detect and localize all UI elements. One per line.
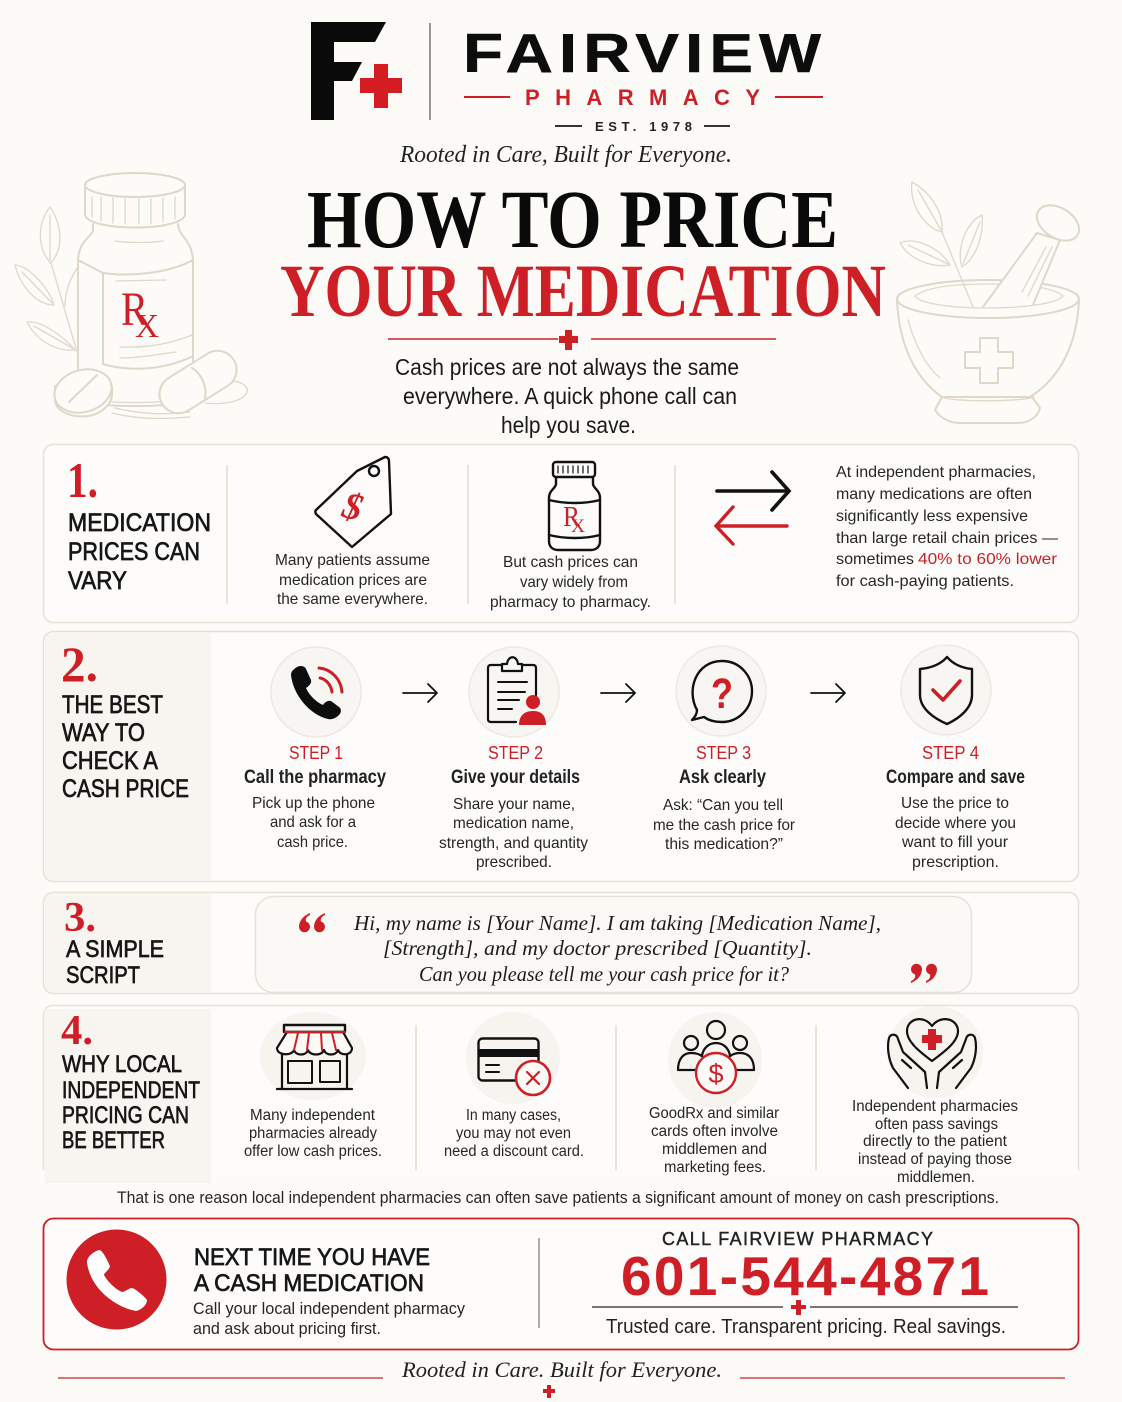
panel: section 1 medication prices can vary [44,444,1078,622]
text: pass savings: instead of paying those [858,1151,1012,1168]
text: middlemen fees: middlemen and [662,1141,767,1158]
text: many patients assume: Many patients assume [275,552,430,569]
wordmark: Pharmacy: PHARMACY [525,85,760,110]
Rx mark: R [121,283,148,336]
text: pass savings: often pass savings [875,1116,998,1133]
text: middlemen fees [649,1105,779,1176]
icon: card with x [466,1012,560,1104]
icon: Rx bottle [549,462,600,550]
heading: 1. [67,452,98,508]
text: middlemen fees: cards often involve [651,1123,778,1140]
step heading: Give your details [451,767,580,788]
step 2 [439,647,588,871]
heading: 3. [64,895,96,941]
arrow [403,684,437,702]
text: pass savings [852,1098,1018,1186]
intro text: help you save. [501,412,636,438]
text: cash prices vary: pharmacy to pharmacy. [490,594,651,611]
heading: THE BEST [62,691,163,719]
icon: shield check [901,645,991,735]
text: many patients assume: medication prices are [279,572,427,589]
phone number block [592,1229,1018,1338]
text: pass savings: middlemen. [897,1169,975,1186]
leaves [15,207,78,352]
text: discount card: you may not even [456,1125,571,1142]
heading: CASH PRICE [62,775,189,803]
text: independent pharmacies savings: sometimes [836,551,914,568]
text: cash prices vary: But cash prices can [503,554,638,571]
wordmark: Fairview: FAIRVIEW [463,22,827,84]
text: low cash prices: Many independent [250,1107,376,1124]
phone number block: Trusted care. Transparent pricing. Real savings. [606,1315,1006,1338]
bottle body [78,224,193,406]
step text [439,796,588,871]
step text: cash price. [277,834,348,851]
panel: call to action [44,1218,1078,1350]
text: middlemen fees: marketing fees. [664,1159,766,1176]
step text: want to fill your [901,834,1009,851]
heading: MEDICATION [68,509,211,537]
panel: section 3 a simple script [44,892,1078,994]
logo mark: F with red cross [311,22,402,120]
step 4 [886,645,1025,871]
icon: storefront [260,1012,366,1100]
text: independent pharmacies savings: for cash-paying patients. [836,573,1014,590]
phone number block: 601-544-4871 [621,1245,989,1307]
heading: 2. [61,636,98,692]
icon: exchange arrows [716,472,789,544]
heading [61,636,189,803]
script text [353,911,881,986]
step label: STEP 4 [922,743,979,763]
step 3 [653,646,796,853]
intro text: everywhere. A quick phone call can [403,383,737,409]
text: many patients assume [275,552,430,608]
tagline: Rooted in Care, Built for Everyone. [399,142,732,168]
summary sentence: That is one reason local independent pharmacies can often save patients a significant amount of money on cash prescriptions. [117,1188,999,1207]
icon: price tag [315,457,391,547]
text: cash prices vary [490,554,651,611]
intro text: Cash prices are not always the same [395,354,739,380]
step text [252,795,375,851]
icon: price tag: $ [337,484,367,530]
arrow [601,684,635,702]
heading [67,452,211,595]
text: independent pharmacies savings: significantly less expensive [836,508,1028,525]
footer tagline: Rooted in Care. Built for Everyone. [401,1357,722,1382]
step 1 [244,647,386,851]
closing quote mark [911,964,937,983]
heading: A SIMPLE [66,936,164,963]
text: low cash prices: pharmacies already [249,1125,377,1142]
heading: PRICES CAN [68,538,200,566]
heading [61,1008,200,1154]
text: cash prices vary: vary widely from [520,574,628,591]
step label: STEP 2 [488,743,543,763]
established date: EST. 1978 [595,119,692,134]
pestle [983,233,1060,307]
text: pass savings: directly to the patient [863,1133,1008,1150]
footer tagline [58,1357,1065,1398]
script text: Hi, my name is [Your Name]. I am taking [Medication Name], [353,911,881,935]
heading: INDEPENDENT [62,1077,200,1104]
step text: decide where you [895,815,1016,832]
icon: Rx bottle: R [563,502,580,533]
heading: WAY TO [62,719,145,747]
opening quote mark [299,913,325,932]
icon: people and dollar coin [668,1012,762,1108]
call to action text [193,1244,466,1338]
heading [64,895,164,989]
text: pass savings: Independent pharmacies [852,1098,1018,1115]
text: independent pharmacies savings: than large retail chain prices — [836,530,1058,547]
text: independent pharmacies savings: 40% to 60% lower [918,551,1058,568]
text: discount card: In many cases, [466,1107,561,1124]
step heading: Compare and save [886,767,1025,788]
icon: Rx bottle: X [571,516,585,537]
call to action text: and ask about pricing first. [193,1320,381,1338]
title line 1: HOW TO PRICE [307,173,838,265]
bottle cap [85,186,185,228]
icon: hands holding heart [887,1006,983,1098]
script speech box [256,896,972,992]
text: independent pharmacies savings [836,464,1058,590]
title [280,173,886,333]
icon: speech bubble question: ? [711,670,733,718]
step text: this medication?” [665,836,783,853]
heading: CHECK A [62,747,158,775]
leaves [900,182,982,307]
text: discount card [444,1107,584,1160]
heading: WHY LOCAL [62,1051,182,1078]
mortar bowl [897,300,1079,397]
step text: Pick up the phone [252,795,375,812]
step text: Ask: “Can you tell [663,797,783,814]
cross on bowl [965,338,1013,383]
illustration: mortar and pestle with leaves [897,182,1085,423]
text: low cash prices: offer low cash prices. [244,1143,382,1160]
step label: STEP 3 [696,743,751,763]
step text: medication name, [453,815,574,832]
step text [653,797,796,853]
text: independent pharmacies savings: At independent pharmacies, [836,464,1036,481]
title divider with cross [388,330,776,350]
step label: STEP 1 [289,743,343,763]
text: low cash prices [244,1107,382,1160]
heading: PRICING CAN [62,1102,189,1129]
intro text [395,354,739,438]
step heading: Ask clearly [679,767,766,788]
heading: VARY [68,567,127,595]
icon: speech bubble question [676,646,766,736]
icon: phone [271,647,361,737]
illustration: pill bottle with leaves and pills [15,173,247,420]
script text: [Strength], and my doctor prescribed [Quantity]. [383,936,812,960]
step text: and ask for a [270,814,356,831]
text: many patients assume: the same everywhere. [277,591,428,608]
icon: clipboard with person [469,647,559,737]
heading: 4. [61,1008,93,1054]
heading: BE BETTER [62,1127,165,1154]
arrow [811,684,845,702]
step text: prescribed. [476,854,552,871]
step text: strength, and quantity [439,835,588,852]
icon: phone in red circle [66,1230,166,1330]
text: middlemen fees: GoodRx and similar [649,1105,779,1122]
step text: me the cash price for [653,817,796,834]
step text: prescription. [912,854,999,871]
script text: Can you please tell me your cash price for it? [419,962,789,986]
Rx mark: X [135,308,159,345]
heading: SCRIPT [66,962,140,989]
step text: Share your name, [453,796,575,813]
call to action text: NEXT TIME YOU HAVE [194,1244,430,1271]
call to action text: Call your local independent pharmacy [193,1300,466,1318]
step heading: Call the pharmacy [244,767,386,788]
icon: people and dollar coin: $ [708,1059,724,1089]
title line 2: YOUR MEDICATION [280,250,886,333]
phone number block: CALL FAIRVIEW PHARMACY [662,1229,933,1249]
text: discount card: need a discount card. [444,1143,584,1160]
panel: section 2 best way to check a cash price [44,632,1078,882]
text: independent pharmacies savings: many medications are often [836,486,1032,503]
panel: section 4 why local independent pricing can be better [44,1006,1079,1186]
logo [311,22,827,134]
step text: Use the price to [901,795,1009,812]
call to action text: A CASH MEDICATION [194,1270,424,1297]
step text [895,795,1016,871]
pills [50,344,247,420]
